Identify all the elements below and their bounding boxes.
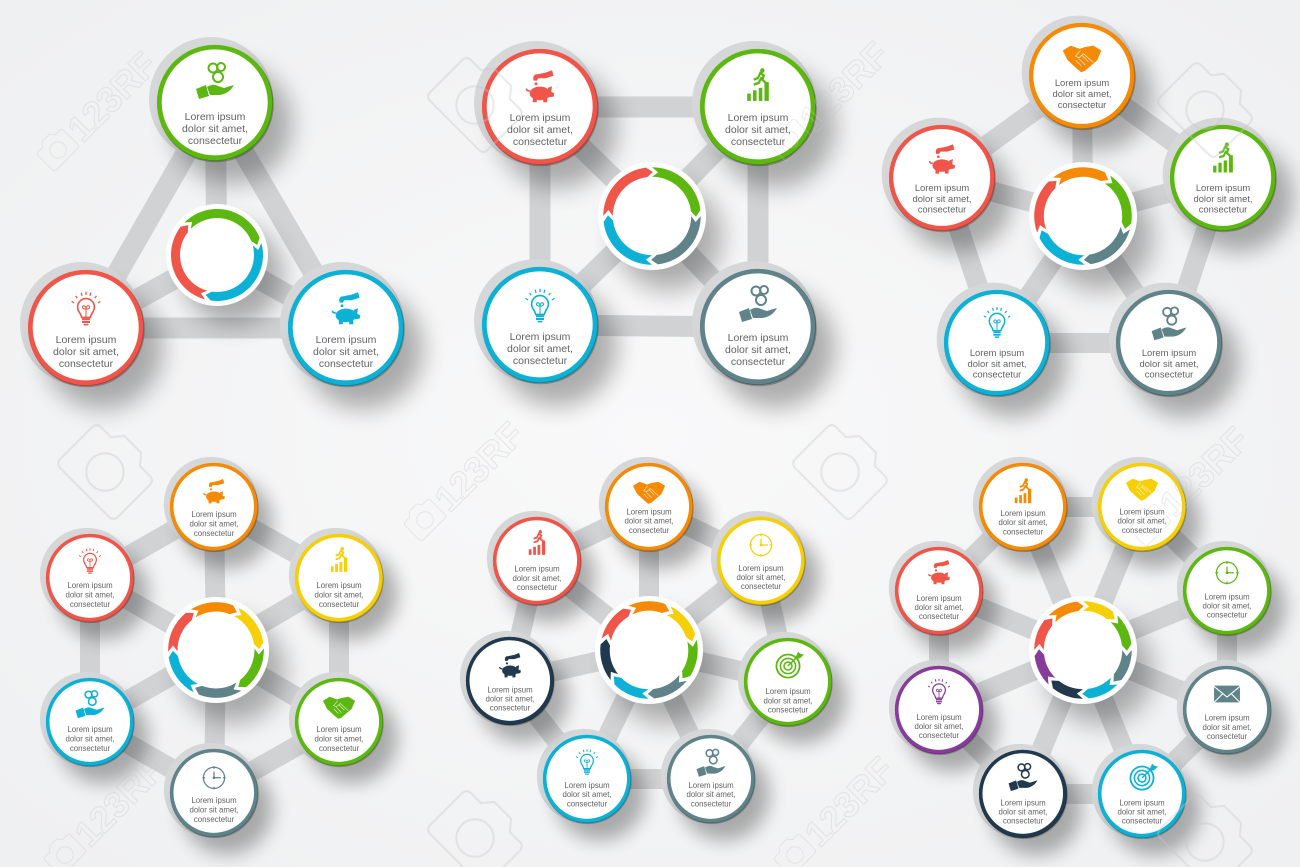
text block: dolor sit amet, (485, 695, 535, 704)
icon: hand with gears (1152, 307, 1186, 340)
text block: consectetur (490, 704, 531, 713)
watermarks: 123RF (59, 44, 165, 149)
text block: dolor sit amet, (65, 734, 115, 743)
node: cyan (1092, 744, 1201, 856)
icon: clock (202, 766, 226, 789)
text block: dolor sit amet, (725, 344, 791, 356)
text block: dolor sit amet, (1139, 358, 1199, 369)
text block: consectetur (1145, 369, 1193, 380)
node: slate (1109, 283, 1239, 417)
watermarks: 123RF (66, 749, 172, 854)
icon: clock (749, 533, 773, 557)
text block: Lorem ipsum (1204, 592, 1250, 601)
text block: consectetur (513, 136, 568, 148)
text block: Lorem ipsum (765, 687, 811, 696)
text block: dolor sit amet, (998, 808, 1048, 817)
text block: consectetur (1122, 817, 1163, 826)
center ring (1026, 593, 1153, 724)
icon: hand with gears (1009, 764, 1037, 791)
text block: dolor sit amet, (512, 574, 562, 583)
text block: dolor sit amet, (507, 124, 573, 136)
node: slate (661, 729, 770, 841)
text block: Lorem ipsum (510, 112, 571, 124)
text block: Lorem ipsum (1142, 347, 1196, 358)
node: cyan (474, 259, 617, 406)
text block: Lorem ipsum (728, 112, 789, 124)
text block: consectetur (319, 600, 360, 609)
node: slate (164, 743, 273, 855)
watermarks: 123RF (1151, 419, 1257, 524)
node: green (149, 37, 292, 184)
text block: consectetur (59, 358, 114, 370)
text block: Lorem ipsum (316, 581, 362, 590)
text block: consectetur (194, 529, 235, 538)
icon: clock (1215, 561, 1239, 584)
text block: Lorem ipsum (1204, 714, 1250, 723)
text block: dolor sit amet, (189, 805, 239, 814)
icon: hand with gears (196, 63, 234, 99)
icon: runner on bars (1213, 142, 1233, 172)
icon: runner on bars (1015, 478, 1031, 503)
connectors (510, 507, 788, 779)
icon: target (776, 652, 804, 678)
text block: Lorem ipsum (316, 725, 362, 734)
center ring (598, 162, 722, 290)
node: red (889, 541, 998, 653)
text block: Lorem ipsum (688, 781, 734, 790)
node: navy (973, 744, 1082, 856)
icon: handshake (633, 482, 665, 504)
text block: consectetur (1199, 204, 1247, 215)
text block: Lorem ipsum (487, 685, 533, 694)
text block: Lorem ipsum (67, 581, 113, 590)
text block: consectetur (918, 204, 966, 215)
text block: dolor sit amet, (314, 590, 364, 599)
text block: consectetur (319, 744, 360, 753)
text block: dolor sit amet, (314, 734, 364, 743)
text block: dolor sit amet, (763, 696, 813, 705)
text block: dolor sit amet, (1202, 601, 1252, 610)
text block: consectetur (741, 582, 782, 591)
text block: dolor sit amet, (507, 343, 573, 355)
center ring (161, 190, 283, 325)
node: red (474, 41, 617, 188)
text block: consectetur (691, 799, 732, 808)
text block: consectetur (1058, 99, 1106, 110)
text block: Lorem ipsum (626, 508, 672, 517)
text block: dolor sit amet, (562, 790, 612, 799)
panel: eight step diagram (889, 457, 1286, 856)
node: navy (460, 631, 569, 743)
icon: envelope (1214, 686, 1240, 702)
text block: dolor sit amet, (912, 193, 972, 204)
icon: handshake (1063, 46, 1101, 72)
text block: dolor sit amet, (53, 346, 119, 358)
node: slate (1177, 660, 1286, 772)
panel: six step diagram (40, 457, 398, 855)
icon: handshake (1126, 479, 1158, 501)
center ring (1022, 150, 1153, 290)
node: red (882, 118, 1012, 252)
connectors (942, 76, 1223, 343)
text block: dolor sit amet, (624, 517, 674, 526)
node: cyan (40, 672, 149, 784)
node: green (1163, 118, 1293, 252)
icon: piggy bank (526, 70, 554, 102)
connectors (540, 107, 758, 327)
text block: dolor sit amet, (736, 573, 786, 582)
text block: dolor sit amet, (1052, 88, 1112, 99)
text block: Lorem ipsum (1000, 509, 1046, 518)
icon: light bulb (576, 749, 598, 775)
text block: consectetur (1207, 732, 1248, 741)
text block: dolor sit amet, (1117, 517, 1167, 526)
text block: Lorem ipsum (185, 111, 246, 123)
node: orange (973, 457, 1082, 569)
icon: light bulb (928, 679, 950, 704)
text block: consectetur (194, 815, 235, 824)
icon: runner on bars (529, 530, 545, 555)
text block: consectetur (517, 583, 558, 592)
text block: Lorem ipsum (1119, 798, 1165, 807)
text block: Lorem ipsum (1196, 182, 1250, 193)
icon: light bulb (526, 289, 554, 322)
icon: runner on bars (331, 547, 347, 572)
icon: piggy bank (499, 653, 521, 677)
text block: consectetur (1122, 526, 1163, 535)
center ring (589, 591, 719, 724)
text block: consectetur (513, 355, 568, 367)
text block: dolor sit amet, (914, 603, 964, 612)
text block: Lorem ipsum (514, 565, 560, 574)
icon: piggy bank (928, 560, 950, 584)
text block: consectetur (567, 799, 608, 808)
text block: consectetur (319, 358, 374, 370)
text block: dolor sit amet, (725, 124, 791, 136)
text block: dolor sit amet, (1202, 723, 1252, 732)
icon: handshake (323, 697, 355, 719)
text block: Lorem ipsum (915, 182, 969, 193)
text block: dolor sit amet, (182, 123, 248, 135)
icon: hand with gears (739, 286, 777, 322)
text block: consectetur (188, 135, 243, 147)
text block: Lorem ipsum (510, 331, 571, 343)
node: green (1177, 541, 1286, 653)
icon: target (1130, 764, 1158, 790)
text block: dolor sit amet, (1117, 808, 1167, 817)
text block: Lorem ipsum (916, 713, 962, 722)
watermarks: 123RF (426, 414, 532, 519)
node: green (289, 672, 398, 784)
text block: Lorem ipsum (1000, 798, 1046, 807)
text block: consectetur (731, 356, 786, 368)
text block: Lorem ipsum (916, 594, 962, 603)
text block: Lorem ipsum (1055, 77, 1109, 88)
text block: Lorem ipsum (1119, 508, 1165, 517)
text block: consectetur (629, 526, 670, 535)
text block: consectetur (919, 731, 960, 740)
text block: dolor sit amet, (967, 358, 1027, 369)
icon: piggy bank (929, 144, 955, 174)
node: slate (692, 261, 835, 408)
node: yellow (1092, 457, 1201, 569)
icon: light bulb (79, 548, 101, 574)
node: green (692, 41, 835, 188)
node: red (20, 262, 163, 409)
icon: runner on bars (747, 68, 769, 101)
node: red (487, 511, 596, 623)
panel: four step diagram (474, 41, 835, 408)
node: purple (889, 660, 998, 772)
connectors (939, 507, 1227, 794)
text block: consectetur (919, 612, 960, 621)
text block: Lorem ipsum (56, 334, 117, 346)
text block: consectetur (768, 705, 809, 714)
node: yellow (289, 528, 398, 640)
text block: dolor sit amet, (313, 346, 379, 358)
node: red (40, 528, 149, 640)
watermarks: 123RF (791, 34, 897, 139)
icon: piggy bank (203, 479, 225, 503)
panel: five step diagram (882, 16, 1293, 417)
icon: light bulb (72, 292, 100, 325)
connectors (90, 507, 339, 793)
panel: three step diagram (20, 37, 423, 409)
watermarks: 123RF (796, 749, 902, 854)
text block: Lorem ipsum (728, 332, 789, 344)
panel: seven step diagram (460, 457, 847, 841)
text block: Lorem ipsum (970, 347, 1024, 358)
icon: piggy bank (332, 292, 360, 324)
text block: consectetur (1003, 527, 1044, 536)
icon: light bulb (984, 307, 1010, 338)
text block: dolor sit amet, (686, 790, 736, 799)
text block: Lorem ipsum (738, 564, 784, 573)
text block: consectetur (1003, 817, 1044, 826)
text block: Lorem ipsum (191, 510, 237, 519)
node: orange (164, 457, 273, 569)
node: yellow (711, 511, 820, 623)
text block: Lorem ipsum (67, 725, 113, 734)
text block: consectetur (70, 744, 111, 753)
text block: dolor sit amet, (1193, 193, 1253, 204)
text block: dolor sit amet, (189, 519, 239, 528)
node: green (738, 632, 847, 744)
node: orange (1022, 16, 1152, 150)
text block: consectetur (731, 136, 786, 148)
text block: consectetur (70, 600, 111, 609)
text block: dolor sit amet, (65, 590, 115, 599)
node: cyan (937, 283, 1067, 417)
node: blue (280, 262, 423, 409)
text block: consectetur (973, 369, 1021, 380)
center ring (160, 589, 285, 723)
text block: Lorem ipsum (316, 334, 377, 346)
text block: Lorem ipsum (191, 796, 237, 805)
node: orange (599, 457, 708, 569)
text block: dolor sit amet, (914, 722, 964, 731)
icon: hand with gears (76, 691, 104, 718)
text block: Lorem ipsum (564, 781, 610, 790)
text block: consectetur (1207, 611, 1248, 620)
icon: hand with gears (697, 749, 725, 777)
node: cyan (537, 729, 646, 841)
connectors (86, 103, 346, 328)
text block: dolor sit amet, (998, 518, 1048, 527)
